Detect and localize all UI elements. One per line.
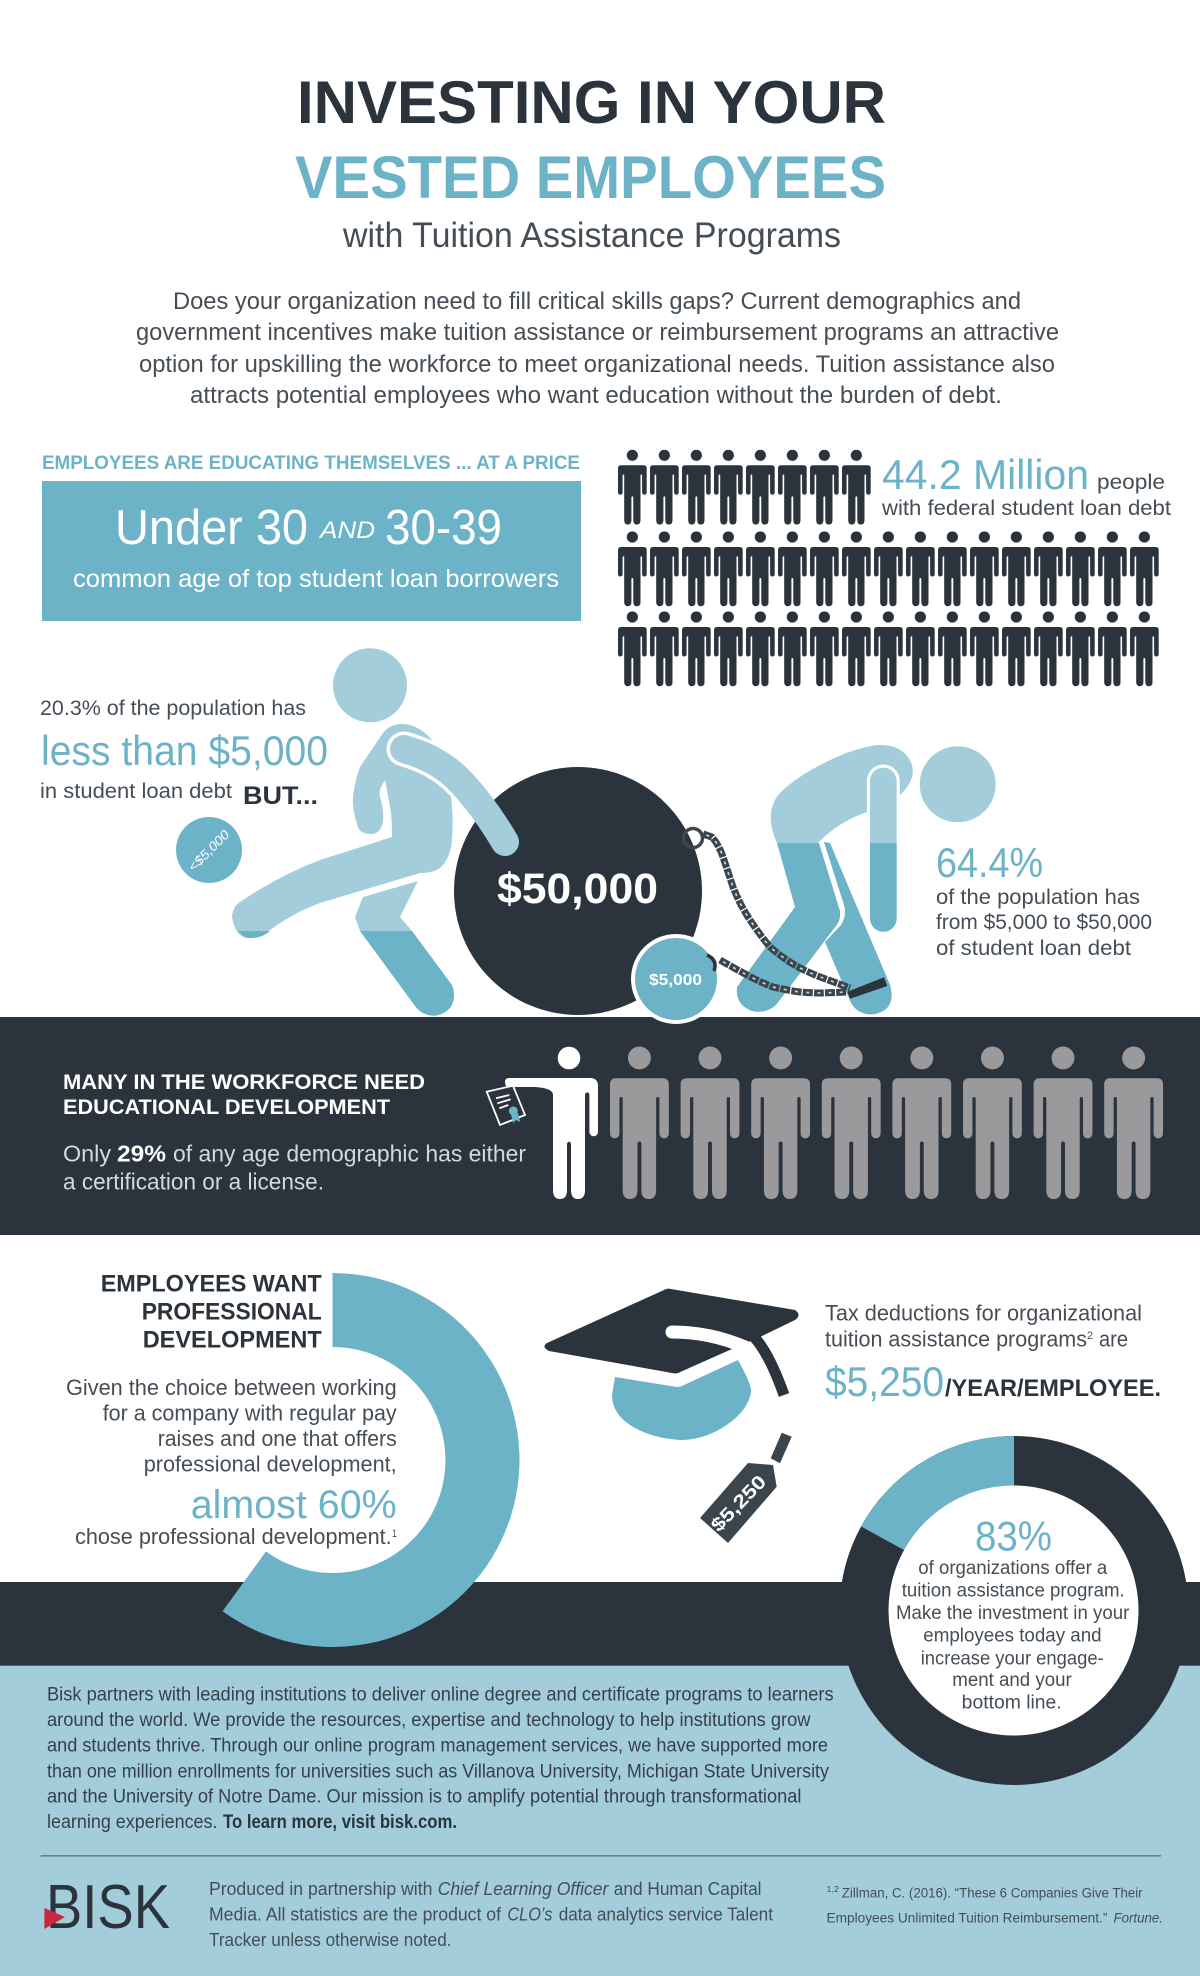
chart: 83 percent donut: increase your engage-	[921, 1648, 1104, 1669]
panel: common age of borrowers: Under 30	[115, 501, 308, 555]
section heading: employees are educating themselves: EMPLOYEES ARE EDUCATING THEMSELVES ... AT A PRICE	[42, 453, 580, 474]
text: footnote: Fortune.	[1114, 1911, 1163, 1926]
panel: common age of borrowers: common age of top student loan borrowers	[73, 565, 559, 593]
logo: Bisk: BISK	[46, 1873, 170, 1942]
figure: certified worker	[505, 1047, 598, 1199]
text: footnote: Employees Unlimited Tuition Reimbursement.”	[826, 1911, 1107, 1926]
text: only 29 percent: 29%	[117, 1140, 166, 1166]
text: footnote: Zillman, C. (2016). “These 6 Companies Give Their	[842, 1885, 1143, 1900]
stat: 64.4 percent: from $5,000 to $50,000	[936, 911, 1152, 934]
text: about Bisk: Bisk partners with leading institutions to deliver online degree and certificate programs to learners	[47, 1685, 834, 1706]
text: tax deductions: $5,250	[825, 1358, 944, 1405]
text: footnote	[826, 1884, 1163, 1926]
heading: many in the workforce: EDUCATIONAL DEVELOPMENT	[63, 1096, 390, 1119]
stat: 20.3 percent less than $5,000: in student loan debt	[40, 780, 232, 803]
icon: diploma	[487, 1086, 525, 1125]
intro paragraph: option for upskilling the workforce to meet organizational needs. Tuition assistance also	[139, 351, 1055, 378]
text: production credit	[209, 1879, 773, 1950]
stat: 64.4 percent: 64.4%	[936, 839, 1043, 886]
text: professional development: raises and one that offers	[158, 1426, 397, 1451]
title: with Tuition Assistance Programs	[342, 216, 841, 255]
text: only 29 percent: of any age demographic has either	[173, 1140, 526, 1166]
stat: 44.2 million: 44.2 Million	[882, 451, 1089, 498]
heading: employees want professional development: DEVELOPMENT	[143, 1327, 322, 1354]
panel: common age of borrowers: 30-39	[385, 501, 502, 555]
figure: person dragging the chain	[737, 745, 996, 1014]
text: professional development: almost 60%	[191, 1483, 397, 1527]
text: about Bisk: and students thrive. Through our online program management services, we have supported more	[47, 1736, 828, 1757]
icon: small ball and chains: $5,000	[649, 972, 702, 989]
text: production credit: data analytics service Talent	[559, 1905, 773, 1925]
chart: 60 percent ring	[223, 1273, 519, 1647]
icon: big debt ball	[454, 767, 702, 1015]
intro paragraph: Does your organization need to fill critical skills gaps? Current demographics and	[173, 288, 1021, 315]
text: footnote: 1,2	[826, 1884, 839, 1894]
dark band: workforce education	[0, 1017, 1200, 1235]
icon: big debt ball: $50,000	[497, 865, 658, 913]
text: professional development: professional development,	[144, 1452, 397, 1477]
figure: person kicking the ball	[232, 648, 505, 1016]
text: only 29 percent: a certification or a license.	[63, 1168, 324, 1194]
icon: graduation cap with price tag: $5,250	[707, 1472, 771, 1537]
text: professional development	[66, 1375, 397, 1549]
text: tax deductions: are	[1099, 1327, 1128, 1352]
stat: 44.2 million: people	[1097, 471, 1165, 494]
panel: common age of borrowers	[42, 481, 581, 621]
stat: 64.4 percent	[936, 839, 1152, 960]
text: only 29 percent	[63, 1140, 526, 1194]
chart: 83 percent donut: Make the investment in your	[896, 1603, 1130, 1624]
text: tax deductions: tuition assistance programs	[825, 1327, 1087, 1352]
heading: employees want professional development: EMPLOYEES WANT	[101, 1271, 322, 1298]
heading: many in the workforce: MANY IN THE WORKFORCE NEED	[63, 1071, 425, 1094]
stat: 20.3 percent less than $5,000	[40, 697, 328, 810]
text: about Bisk	[47, 1685, 834, 1833]
stat: 64.4 percent: of student loan debt	[936, 937, 1131, 960]
text: about Bisk: than one million enrollments for universities such as Villanova University, Michigan State University	[47, 1761, 829, 1782]
stat: 64.4 percent: of the population has	[936, 886, 1140, 909]
text: only 29 percent: Only	[63, 1140, 112, 1166]
title	[295, 69, 886, 255]
stat: 20.3 percent less than $5,000: 20.3% of the population has	[40, 697, 306, 720]
stat: 20.3 percent less than $5,000: less than $5,000	[41, 727, 328, 774]
pictogram: uncertified workers	[610, 1047, 1163, 1199]
text: tax deductions: /YEAR/EMPLOYEE.	[945, 1375, 1161, 1402]
text: professional development: Given the choice between working	[66, 1375, 397, 1400]
text: production credit: CLO’s	[507, 1905, 552, 1925]
lower dark band	[0, 1582, 1200, 1666]
text: tax deductions: 2	[1087, 1330, 1093, 1342]
icon: graduation cap with price tag	[544, 1289, 798, 1543]
stat: 44.2 million	[881, 451, 1171, 520]
icon: small debt ball: <$5,000	[185, 826, 233, 874]
chart: 83 percent donut: ment and your	[952, 1670, 1072, 1691]
text: professional development: 1	[392, 1528, 397, 1540]
text: production credit: and Human Capital	[614, 1879, 762, 1899]
chart: 83 percent donut: 83%	[975, 1513, 1052, 1560]
icon: small ball and chains	[631, 828, 850, 1024]
text: production credit: Chief Learning Officer	[438, 1879, 609, 1899]
text: professional development: for a company with regular pay	[103, 1401, 397, 1426]
text: about Bisk: and the University of Notre Dame. Our mission is to amplify potential through transformational	[47, 1787, 801, 1808]
chart: 83 percent donut: employees today and	[923, 1626, 1102, 1647]
text: production credit: Produced in partnership with	[209, 1879, 432, 1899]
stat: 20.3 percent less than $5,000: BUT...	[243, 782, 318, 810]
panel: common age of borrowers: AND	[318, 517, 375, 544]
text: about Bisk: To learn more, visit bisk.com.	[223, 1812, 457, 1833]
text: professional development: chose professional development.	[75, 1524, 392, 1549]
chart: 83 percent donut: tuition assistance program.	[902, 1581, 1125, 1602]
intro paragraph: attracts potential employees who want education without the burden of debt.	[190, 382, 1002, 409]
chart: 83 percent donut: bottom line.	[962, 1692, 1062, 1713]
text: production credit: Media. All statistics are the product of	[209, 1905, 502, 1925]
footer background	[0, 1666, 1200, 1976]
text: about Bisk: learning experiences.	[47, 1812, 218, 1833]
text: about Bisk: around the world. We provide the resources, expertise and technology to help institutions grow	[47, 1710, 811, 1731]
chart: 83 percent donut	[840, 1436, 1188, 1785]
text: tax deductions	[825, 1301, 1161, 1405]
chart: 83 percent donut: of organizations offer a	[918, 1558, 1108, 1579]
text: tax deductions: Tax deductions for organizational	[825, 1301, 1142, 1326]
heading: many in the workforce	[63, 1071, 425, 1119]
pictogram: 44.2 million borrowers	[618, 450, 1159, 686]
heading: employees want professional development: PROFESSIONAL	[142, 1299, 322, 1326]
text: production credit: Tracker unless otherwise noted.	[209, 1930, 452, 1950]
title: VESTED EMPLOYEES	[295, 144, 886, 211]
heading: employees want professional development	[101, 1271, 322, 1354]
stat: 44.2 million: with federal student loan debt	[881, 497, 1171, 520]
intro paragraph: government incentives make tuition assistance or reimbursement programs an attractive	[136, 319, 1059, 346]
title: INVESTING IN YOUR	[297, 69, 886, 136]
intro paragraph	[136, 288, 1059, 409]
icon: small debt ball	[176, 817, 242, 883]
